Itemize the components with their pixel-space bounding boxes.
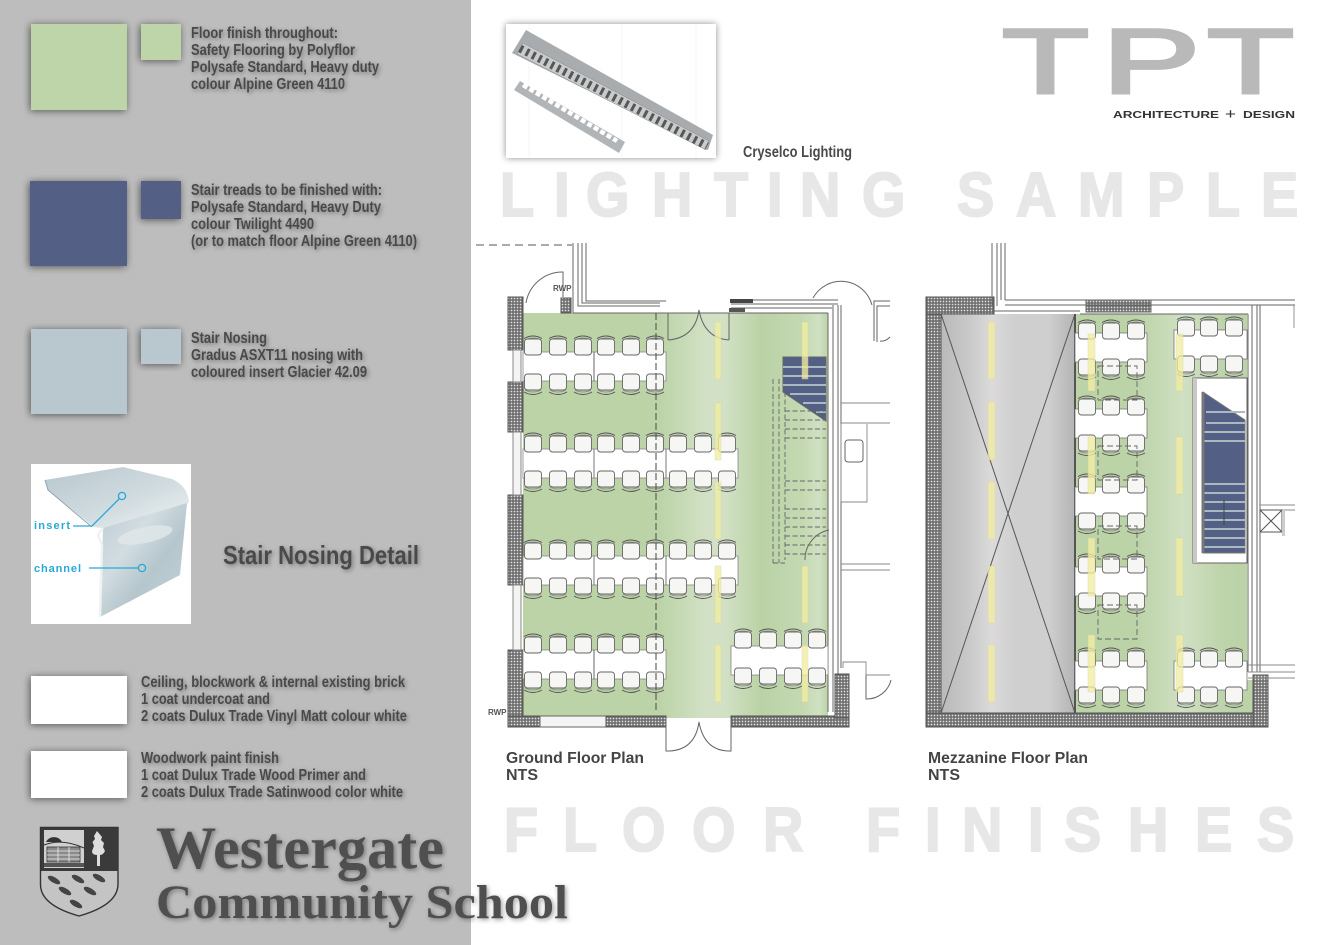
caption: Cryselco Lighting: Cryselco Lighting (743, 144, 852, 161)
watermark heading: lighting sample: LIGHTINGSAMPLE (500, 161, 1298, 230)
swatch: Twilight large (30, 181, 127, 266)
logo: TPT architecture and design: ARCHITECTURE (1113, 110, 1219, 121)
panel: woodwork paint entry (31, 750, 403, 801)
logo: TPT architecture and design: T (1207, 10, 1294, 113)
swatch: white ceiling (31, 676, 127, 724)
callout: channel: channel (34, 563, 81, 575)
stairs: dashed flight below (773, 379, 826, 563)
text: stair tread specification: (or to match floor Alpine Green 4110) (191, 233, 417, 250)
tables and chairs (1075, 317, 1247, 708)
external outline (476, 243, 841, 712)
annex outlines (841, 301, 890, 675)
caption: mezzanine floor plan: NTS (928, 767, 960, 784)
swatch: Alpine Green small (141, 24, 181, 60)
text: floor finish specification: Safety Flooring by Polyflor (191, 42, 355, 59)
logo: TPT architecture and design: + (1225, 106, 1236, 123)
outline and right-hand walls (992, 243, 1295, 678)
callout: channel (34, 563, 146, 575)
tables and chairs (523, 336, 828, 692)
panel: finishes sidebar (0, 0, 471, 945)
logo: TPT architecture and design: T (1002, 10, 1089, 113)
swatch: Alpine Green large (31, 24, 127, 110)
doors (526, 272, 891, 751)
text: ceiling paint specification: Ceiling, blockwork & internal existing brick (141, 674, 405, 691)
dashed structure line (655, 313, 657, 713)
text: floor finish specification: colour Alpine Green 4110 (191, 76, 345, 93)
logo: TPT architecture and design (1002, 10, 1295, 123)
chart: mezzanine floor plan (926, 243, 1295, 727)
void area with cross (941, 314, 1075, 713)
text: stair nosing specification: Gradus ASXT11 nosing with (191, 347, 363, 364)
swatch: Glacier small (141, 329, 181, 364)
text: stair nosing specification (191, 330, 367, 381)
text: woodwork paint specification: 2 coats Dulux Trade Satinwood color white (141, 784, 403, 801)
text: woodwork paint specification: 1 coat Dulux Trade Wood Primer and (141, 767, 366, 784)
stairs: Twilight treads (1193, 378, 1247, 563)
panel: stair nosing entry (31, 329, 367, 414)
chart: ground floor plan (476, 243, 891, 751)
swatch: Twilight small (141, 181, 181, 219)
floor area (523, 313, 828, 718)
label: RWP top: RWP (553, 284, 572, 293)
panel: ceiling paint entry (31, 674, 407, 725)
watermark heading: floor finishes: FLOORFINISHES (504, 796, 1294, 865)
logo: TPT architecture and design: P (1102, 11, 1200, 113)
text: stair tread specification: colour Twilight 4490 (191, 216, 314, 233)
caption: ground floor plan (506, 750, 644, 784)
text: stair tread specification: Stair treads to be finished with: (191, 182, 382, 199)
walls with hatching (926, 297, 1268, 727)
stairs: Twilight treads (783, 357, 826, 421)
text: woodwork paint specification (141, 750, 403, 801)
icon: school crest (40, 828, 118, 916)
text: floor finish specification: Floor finish throughout: (191, 25, 338, 42)
text: woodwork paint specification: Woodwork paint finish (141, 750, 279, 767)
logo: TPT architecture and design: DESIGN (1243, 110, 1295, 121)
text: floor finish specification: Polysafe Standard, Heavy duty (191, 59, 379, 76)
callout: insert (34, 492, 126, 532)
caption: mezzanine floor plan (928, 750, 1088, 784)
caption: ground floor plan: NTS (506, 767, 538, 784)
walls with hatching (508, 297, 849, 727)
text: ceiling paint specification: 1 coat undercoat and (141, 691, 270, 708)
text: stair tread specification (191, 182, 417, 250)
ceiling lights (988, 322, 1183, 702)
text: stair tread specification: Polysafe Standard, Heavy Duty (191, 199, 381, 216)
text: floor finish specification (191, 25, 379, 93)
swatch: white woodwork (31, 751, 127, 798)
panel: floor finish entry (31, 24, 379, 110)
heading: stair nosing detail: Stair Nosing Detail (223, 540, 419, 570)
ceiling lights (715, 322, 808, 702)
floor area (1075, 314, 1253, 713)
panel: stair tread entry (30, 181, 417, 266)
text: stair nosing specification: Stair Nosing (191, 330, 267, 347)
text: ceiling paint specification: 2 coats Dulux Trade Vinyl Matt colour white (141, 708, 407, 725)
text: ceiling paint specification (141, 674, 407, 725)
callout: insert: insert (34, 520, 70, 532)
image: stair nosing detail (31, 464, 191, 624)
image: Cryselco light fittings (506, 24, 716, 158)
title: school name: Community School (156, 876, 568, 929)
swatch: Glacier large (31, 329, 127, 414)
title: school name (156, 815, 568, 929)
text: stair nosing specification: coloured insert Glacier 42.09 (191, 364, 367, 381)
dashed overhead outlines (1098, 366, 1137, 639)
caption: mezzanine floor plan: Mezzanine Floor Plan (928, 750, 1088, 767)
title: school name: Westergate (156, 815, 444, 881)
label: RWP bottom: RWP (488, 708, 507, 717)
caption: ground floor plan: Ground Floor Plan (506, 750, 644, 767)
